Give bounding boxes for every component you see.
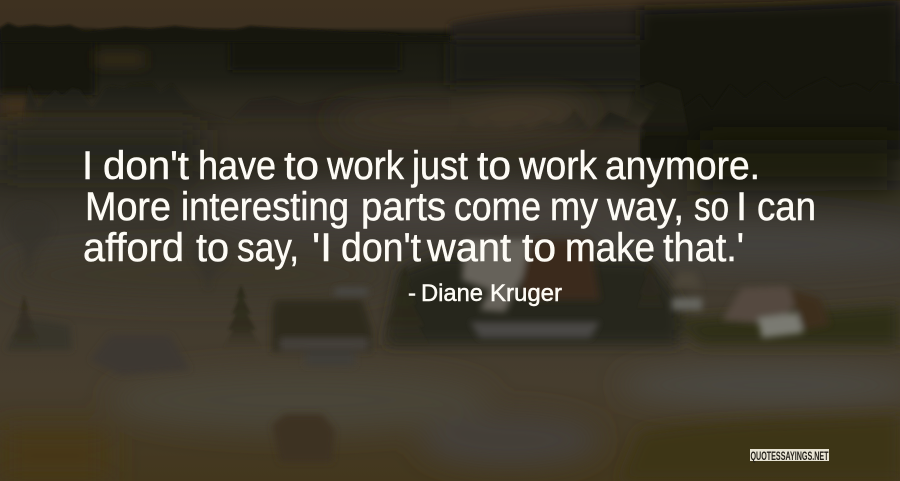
quote line 1: have [198,144,276,188]
attribution: - [408,280,416,307]
quote line 3: to [522,226,556,270]
quote line 2: can [757,185,816,229]
quote line 3: afford [83,226,184,270]
quote line 2: way, [606,185,684,229]
quote line 2: interesting [181,185,349,229]
attribution: Kruger [490,280,562,307]
conifers [8,262,665,352]
top treeline [0,23,450,42]
soft fog and tonal patches [0,100,900,481]
quote line 1: don't [103,144,189,188]
quote line 3: to [196,226,229,270]
quote line 2: parts [361,185,446,229]
attribution: Diane [421,280,483,307]
quote line 1: just [411,144,468,188]
quote line 3 [83,226,744,270]
quote line 1: to [477,144,511,188]
olive foreground field [620,416,900,481]
mid treeline left [22,82,450,125]
dark woods behind houses [385,255,900,345]
quote line 1: anymore. [605,144,760,188]
quote line 1: I [82,144,93,188]
quote line 3: don't [341,226,421,270]
mid treeline right [640,78,900,160]
quote line 3: 'I [312,226,332,270]
quote line 3: say, [237,226,299,270]
attribution [408,280,562,307]
dark hills and forests at the top [0,0,900,95]
watermark: QUOTESSAYINGS.NET [750,449,829,463]
quote line 1: work [326,144,405,188]
quote line 2: More [85,185,171,229]
barn and houses [5,240,830,462]
quote line 2: so [694,185,729,229]
quote line 1: to [284,144,319,188]
quote text [82,144,816,270]
quote line 2: I [736,185,747,229]
quote line 2 [85,185,816,229]
quote line 3: that.' [663,226,744,270]
quote line 3: want [426,226,511,270]
tree crowns behind the text [8,205,228,288]
quote line 3: make [565,226,655,270]
watermark [750,449,829,463]
quote line 2: my [550,185,598,229]
quote line 1 [82,144,760,188]
quote line 2: come [454,185,541,229]
quote line 1: work [518,144,598,188]
